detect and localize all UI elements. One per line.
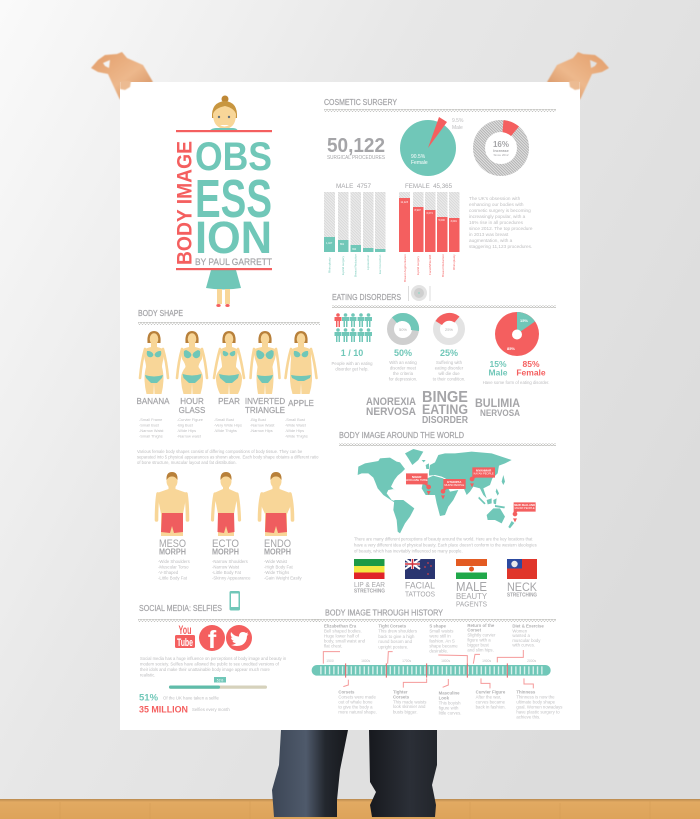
stat: 35 million: Selfies every month (192, 707, 230, 712)
event: tight corsets: Tight Corsets (378, 624, 407, 629)
stat: depression: With an eating (389, 360, 417, 365)
event: thinness: have plastic surgery to (516, 709, 560, 714)
bar chart: male: 1,027 (326, 242, 333, 245)
callout: niger: NIGER (412, 475, 422, 479)
stat: 51 percent: 51% (139, 692, 159, 704)
stat: one in ten: 1 / 10 (341, 348, 363, 358)
event: elizabethan era: body, small waist and (324, 639, 366, 644)
event: diet and exercise: wanted a (512, 633, 530, 638)
word cluster: disorder types: BINGE (422, 389, 468, 406)
stat: surgical procedures: SURGICAL PROCEDURES (327, 155, 386, 161)
event: thinness (516, 689, 562, 719)
event: elizabethan era: Elizabethan Era (324, 624, 357, 629)
event: return of the corset: and slim hips. (467, 647, 494, 652)
event: elizabethan era (324, 624, 366, 648)
title bars (176, 130, 272, 270)
labels: male morph names: MORPH (159, 548, 186, 556)
era markers (346, 663, 507, 678)
pie chart: eating disorders by gender (495, 312, 539, 356)
labels: male morph names: MORPH (212, 548, 239, 556)
text block: body shape description: of bone structure, muscular layout and fat distribution. (137, 460, 237, 465)
event: tighter corsets: Tighter (393, 690, 408, 695)
bar chart: female: Breast Reduction (441, 254, 445, 277)
text block: world description (354, 536, 537, 554)
donut chart: 16% increase: Since 2012 (493, 153, 509, 157)
event: s shape: were still in (429, 634, 451, 639)
text block: world description: have a very different idea of physical beauty. Each place doesn't conform to the western ideologies (354, 542, 537, 548)
text block: cosmetic surgery summary: 16% rise in all procedures (469, 220, 524, 225)
progress bar: selfie share (169, 677, 267, 689)
event: corsets: more natural shape. (338, 710, 377, 715)
text block: world description: of beauty, which has inevitably influenced so many people. (354, 548, 463, 554)
stat: mortality: eating disorder (435, 366, 464, 370)
event: tighter corsets (393, 690, 426, 714)
event: tight corsets: round bosom and (378, 639, 413, 644)
bar chart: male: MALE 4757 (336, 183, 371, 190)
stat: gender split: Have some form of eating disorder. (483, 380, 549, 385)
lists: male morph traits: -High Body Fat (264, 564, 293, 570)
labels: male morph names: MORPH (264, 548, 291, 556)
bar chart: male: Rhinoplasty (328, 257, 332, 273)
event: s shape: shape became (429, 644, 458, 649)
lists: male morph traits: -Wide Waist (264, 559, 288, 564)
text block: cosmetic surgery summary: since 2012. The top procedure (469, 226, 533, 231)
lists: body shape traits: -Small Frame (139, 417, 162, 422)
lists: body shape traits: -Small Thighs (139, 434, 163, 438)
icon: youtube: Tube (177, 637, 193, 649)
text block: cosmetic surgery summary: staggering 11,123 procedures. (469, 244, 532, 249)
labels: flag captions: NECK (507, 580, 537, 594)
lists: body shape traits: -Small Bust (139, 422, 160, 428)
event: masculine look (439, 690, 462, 715)
icon: plate (408, 285, 430, 301)
left fingertips over poster (120, 81, 131, 90)
bar chart: male: 390 (352, 248, 357, 251)
event: corsets (338, 689, 377, 715)
heading: through history: BODY IMAGE THROUGH HISTORY (325, 608, 443, 618)
event: curvier figure: After the war, (476, 694, 501, 699)
stat: 51 percent (139, 692, 220, 704)
event: tighter corsets: This made waists (393, 699, 426, 704)
labels: flag captions: BEAUTY (456, 591, 487, 601)
lists: body shape traits: -Big Bust (250, 417, 267, 422)
bar chart: female: Rhinoplasty (452, 254, 456, 270)
pie chart: gender split (400, 117, 464, 176)
stat: mortality (433, 348, 465, 382)
decade labels: 2000s (527, 659, 537, 663)
word cluster: disorder types: BULIMIA (475, 398, 520, 410)
callout: new zealand: NEW ZEALAND (514, 503, 535, 507)
donut chart: 25 percent: 25% (445, 327, 453, 332)
decade labels: 1700s (402, 659, 412, 663)
icon: youtube: You (178, 625, 192, 637)
heading: social media: SOCIAL MEDIA: SELFIES (139, 604, 222, 613)
event: corsets: out of whale bone (338, 699, 373, 704)
lists: body shape traits: -Wide Hips (285, 428, 304, 433)
decade labels (326, 659, 537, 663)
stat: 35 million: 35 MILLION (139, 704, 188, 716)
callout: myanmar: KAYAN PEOPLE (474, 471, 494, 475)
event: diet and exercise: with curves. (512, 643, 535, 648)
bar chart: male: Liposuction (366, 254, 370, 270)
bar chart: female (399, 183, 460, 282)
decade labels: 1900s (482, 659, 492, 663)
event: return of the corset: figure with a (467, 638, 491, 643)
lists: male morph traits: -Skinny Appearance (212, 576, 251, 580)
pie chart: gender split: Male (452, 125, 463, 131)
donut chart: 25 percent (436, 313, 462, 342)
text block: cosmetic surgery summary (469, 196, 533, 249)
figure: pear (214, 331, 244, 394)
word cluster: disorder types: NERVOSA (366, 406, 416, 418)
event: s shape: S shape (429, 624, 447, 629)
poster sheet (120, 82, 580, 730)
lists: body shape traits: -Narrow Waist (139, 428, 164, 433)
labels: flag captions: STRETCHING (354, 588, 385, 594)
lists: male morph traits: -Gain Weight Easily (264, 576, 303, 580)
figure: apple (286, 331, 316, 394)
event: tighter corsets: Corsets (393, 694, 410, 699)
labels: body shape names: GLASS (179, 406, 205, 415)
event: diet and exercise: Diet & Exercise (512, 624, 544, 629)
event: diet and exercise: Women (512, 628, 528, 633)
right fingertips over poster (569, 81, 580, 90)
labels: flag captions: LIP & EAR (354, 582, 385, 589)
event: elizabethan era: flat chest. (324, 643, 343, 648)
text block: social media description: realistic. (140, 672, 155, 678)
world map (358, 449, 536, 533)
lists: male morph traits: -Narrow Waist (212, 564, 240, 570)
panel: eating disorders (331, 285, 556, 426)
event: thinness: Thinness is now the (516, 694, 555, 699)
labels: body shape names: INVERTED (245, 397, 285, 406)
legs in jeans (272, 730, 437, 817)
event: elizabethan era: Bell shaped bodies. (324, 629, 362, 634)
donut chart: 16% increase: 16% (493, 140, 509, 149)
event: thinness: achieve this. (516, 714, 540, 719)
event: diet and exercise (512, 624, 544, 648)
lists: male morph traits: -Little Body Fat (158, 576, 188, 580)
labels: flag captions: TATTOOS (405, 590, 435, 598)
donut chart: 16% increase (479, 120, 523, 170)
lists: body shape traits: -Small Bust (214, 417, 235, 422)
event: masculine look: This boyish (439, 700, 461, 705)
text block: cosmetic surgery summary: enhancing our bodies with (469, 202, 524, 207)
title: obsession: ESS (195, 169, 272, 229)
lists: male morph traits: -V-Shaped (158, 570, 179, 575)
pie chart: eating disorders by gender: 85% (507, 346, 515, 351)
event: masculine look: Look (439, 695, 450, 700)
event: masculine look: Masculine (439, 690, 460, 695)
text block: cosmetic surgery summary: in 2013 was breast (469, 232, 509, 237)
bar chart: female: Breast Augmentation (403, 254, 407, 282)
bar chart: female: 3,091 (450, 220, 457, 223)
pie chart: gender split: Female (411, 160, 428, 166)
icon: facebook: f (208, 626, 217, 654)
lists: body shape traits (139, 417, 308, 438)
title: obsession: OBS (195, 135, 272, 179)
event: corsets: Corsets (338, 689, 355, 694)
timeline (312, 623, 562, 719)
event: s shape (429, 624, 458, 653)
icon: phone (230, 591, 240, 610)
text block: cosmetic surgery summary: augmentation, with a (469, 238, 513, 243)
icon: twitter (226, 625, 252, 651)
lists: body shape traits: -Curvier Figure (177, 417, 203, 422)
callout: ethiopia: MURSI PEOPLE (444, 483, 465, 487)
stat: mortality: to their condition. (433, 376, 465, 382)
event: return of the corset: bigger bust (467, 643, 490, 648)
callout: myanmar (470, 467, 495, 487)
labels: male morph names: MESO (159, 538, 186, 550)
labels: flag captions: MALE (456, 579, 487, 594)
left hand holding poster (91, 52, 153, 100)
lists: male morph traits: -Wide Shoulders (158, 559, 190, 564)
word cluster: disorder types (366, 389, 520, 426)
stat: surgical procedures: 50,122 (327, 134, 385, 157)
pie chart: gender split: 90.5% (411, 154, 426, 160)
event: curvier figure: curves became (476, 699, 506, 704)
figure: inverted triangle (250, 331, 280, 394)
event: tighter corsets: busts bigger. (393, 709, 418, 714)
lists: body shape traits: -Narrow Waist (250, 422, 275, 428)
bar chart: female: FEMALE 45,365 (405, 183, 452, 190)
stat: 51 percent: Of the UK have taken a selfie (163, 696, 220, 700)
stat: gender split: 85% (522, 359, 540, 369)
lists: male morph traits: -Little Body Fat (212, 570, 242, 575)
stat: gender split: Male (489, 368, 508, 378)
event: masculine look: little curves. (439, 710, 462, 715)
stat: depression: the criteria (393, 371, 414, 376)
byline: BY PAUL GARRETT (195, 257, 272, 268)
labels: male morph names (159, 538, 291, 556)
event: s shape: desirable. (429, 648, 448, 653)
figure: banana (140, 331, 168, 394)
callout: myanmar: MYANMAR (476, 468, 492, 472)
stat: mortality: Suffering with (436, 360, 463, 365)
text block: body shape description: separated into 5 physical appearances as shown above. Each body shape obtains a different ratio (137, 454, 319, 460)
figure: hourglass (177, 331, 207, 394)
word cluster: disorder types: EATING (422, 402, 468, 417)
labels: body shape names: TRIANGLE (245, 406, 285, 415)
figure: mesomorph (156, 472, 188, 536)
event: corsets: to give the body a (338, 704, 373, 709)
lists: body shape traits: -Narrow Hips (250, 428, 273, 433)
bar chart: female: 8,907 (414, 209, 421, 212)
word cluster: disorder types: ANOREXIA (366, 396, 416, 408)
bar chart: male: Ear Correction (378, 254, 382, 274)
text block: social media description: their idols and make their unattainable body image appear much more (140, 667, 271, 672)
progress bar: selfie share: 51% (217, 678, 223, 682)
event: return of the corset: Corset (467, 628, 482, 633)
panel: body image around the world (339, 431, 556, 608)
woman figure holding title (206, 96, 241, 307)
text block: social media description: Social media has a huge influence on perceptions of body image and beauty in (140, 656, 287, 661)
labels: flag captions: STRETCHING (507, 592, 537, 598)
title: obsession: ION (195, 212, 272, 263)
word cluster: disorder types: NERVOSA (480, 408, 520, 418)
callout: ethiopia: ETHIOPIA (447, 480, 462, 484)
text block: cosmetic surgery summary: cosmetic surgery is becoming (469, 208, 531, 213)
donut chart: 50 percent: 50% (399, 327, 407, 332)
donut chart: 50 percent (390, 313, 419, 342)
heading: eating disorders: EATING DISORDERS (332, 293, 401, 302)
lists: male morph traits: -Wide Thighs (264, 570, 289, 575)
event: thinness: goal. Women nowadays (516, 704, 562, 709)
lists: body shape traits: -Wide Waist (285, 422, 307, 428)
event: thinness: ultimate body shape (516, 699, 556, 704)
event: return of the corset (467, 623, 496, 652)
labels: body shape names: PEAR (218, 397, 240, 406)
stat: depression: disorder meet (390, 366, 417, 370)
labels: body shape names: BANANA (137, 397, 170, 406)
event: tight corsets: back to give a high (378, 634, 415, 639)
callout: new zealand: MAORI PEOPLE (515, 506, 535, 510)
panel: cosmetic surgery (324, 98, 556, 282)
stat: depression: for depression. (389, 376, 417, 382)
labels: flag captions: PAGENTS (456, 602, 487, 608)
pie chart: eating disorders by gender: 15% (520, 318, 528, 323)
bar chart: female: Eyelid surgery (416, 255, 420, 275)
lists: body shape traits: -Narrow waist (177, 434, 202, 438)
event: curvier figure: Curvier Figure (476, 689, 506, 694)
stat: mortality: 25% (440, 348, 458, 358)
panel: body image through history (312, 608, 562, 719)
bar chart: male: Breast Reduction (354, 254, 358, 277)
flag: new zealand (405, 559, 435, 579)
bar chart: female: Facelift/Necklift (428, 254, 432, 275)
heading: body shape: BODY SHAPE (138, 309, 183, 318)
heading: cosmetic surgery: COSMETIC SURGERY (324, 98, 397, 107)
timeline bar (312, 665, 551, 676)
labels: male morph names: ENDO (264, 538, 291, 550)
flag: myanmar (507, 559, 537, 579)
text block: cosmetic surgery summary: The UK's obsession with (469, 196, 521, 201)
event: corsets: Corsets were made (338, 694, 376, 699)
lists: body shape traits: -Wide Thighs (214, 428, 237, 433)
stat: one in ten (331, 348, 373, 372)
labels: body shape names (137, 397, 314, 415)
event: elizabethan era: Huge lower half of (324, 634, 360, 639)
event: tight corsets (378, 624, 417, 649)
lists: body shape traits: -Big Bust (177, 422, 194, 428)
figure: endomorph (260, 472, 292, 536)
event: curvier figure: back in fashion. (476, 704, 506, 709)
labels: flag captions (354, 579, 537, 608)
icon: youtube (175, 625, 195, 649)
stat: one in ten: disorder get help. (335, 366, 369, 372)
panel: title figure (172, 96, 272, 307)
right hand holding poster (547, 52, 609, 100)
event: thinness: Thinness (516, 689, 536, 694)
stat: depression: 50% (394, 348, 412, 358)
figure: ectomorph (212, 472, 240, 536)
lists: body shape traits: -Wide Hips (177, 428, 196, 433)
event: return of the corset: Return of the (467, 623, 495, 628)
heading: around the world: BODY IMAGE AROUND THE WORLD (339, 431, 464, 440)
title: obsession (195, 135, 272, 263)
stat: 35 million (139, 704, 230, 716)
labels: body shape names: HOUR (180, 397, 204, 406)
bar chart: male: Eyelid surgery (341, 255, 345, 275)
lists: body shape traits: -Very Wide Hips (214, 422, 242, 428)
event: diet and exercise: muscular body (512, 638, 541, 643)
callout: new zealand (513, 502, 536, 522)
bar chart: female: 6,074 (426, 212, 433, 215)
bar chart: male (324, 183, 386, 277)
callout: niger: WODAABE TRIBE (406, 478, 428, 482)
event: s shape: Small waists (429, 629, 453, 634)
lists: body shape traits: -Wide Thighs (285, 434, 308, 438)
decade labels: 1600s (361, 659, 371, 663)
stat: mortality: will die due (438, 371, 460, 376)
lists: male morph traits: -Muscular Torso (158, 564, 189, 570)
icon: facebook (199, 625, 225, 654)
panel: social media (138, 591, 320, 716)
callout: niger (406, 473, 431, 495)
labels: male morph names: ECTO (212, 538, 239, 550)
text block: world description: There are many different perceptions of beauty around the world. Here are the key locations that (354, 536, 533, 542)
stat: gender split (483, 359, 549, 385)
connectors (323, 650, 533, 688)
bar chart: male: 861 (340, 243, 345, 246)
donut chart: 16% increase: Increase (493, 149, 509, 153)
event: s shape: fashion. An S (429, 639, 455, 644)
pie chart: gender split: 9.5% (452, 118, 464, 124)
event: masculine look: figure with (439, 705, 459, 710)
word cluster: disorder types: DISORDER (422, 415, 469, 426)
text block: body shape description: Various female body shapes consist of differing compositions of body tissue. They can be (137, 449, 303, 454)
labels: flag captions: FACIAL (405, 580, 435, 592)
event: tighter corsets: look skinnier and (393, 704, 426, 709)
text block: social media description (140, 656, 287, 678)
lists: male morph traits (158, 559, 303, 580)
text block: body shape description (137, 449, 319, 465)
flag: niger (456, 559, 487, 579)
decade labels: 1500 (326, 659, 334, 663)
bar chart: female: 11,123 (400, 201, 409, 204)
stat: gender split: Female (516, 368, 546, 378)
stat: gender split: 15% (489, 359, 507, 369)
bar chart: female: 5,000 (438, 219, 445, 222)
stat: one in ten: People with an eating (331, 361, 373, 366)
panel: body shape (137, 309, 320, 580)
title: body image: BODY IMAGE (172, 141, 196, 265)
labels: body shape names: APPLE (288, 399, 314, 408)
wooden floor (0, 799, 700, 819)
lists: body shape traits: -Small Bust (285, 417, 306, 422)
stat: depression (389, 348, 417, 382)
decade labels: 1800s (441, 659, 451, 663)
event: tight corsets: upright posture. (378, 644, 408, 649)
text block: social media description: modern society. Selfies have allowed the public to see unedited versions of (140, 662, 280, 666)
event: curvier figure (476, 689, 506, 709)
lists: male morph traits: -Narrow Shoulders (212, 559, 248, 564)
pictogram: 1 in 10 people (334, 313, 372, 342)
event: return of the corset: Slightly curvier (467, 633, 496, 638)
flag: ethiopia (354, 559, 384, 579)
callout: ethiopia (441, 479, 466, 499)
event: tight corsets: This drew shoulders (378, 629, 417, 634)
text block: cosmetic surgery summary: increasingly popular, with a (469, 214, 526, 219)
